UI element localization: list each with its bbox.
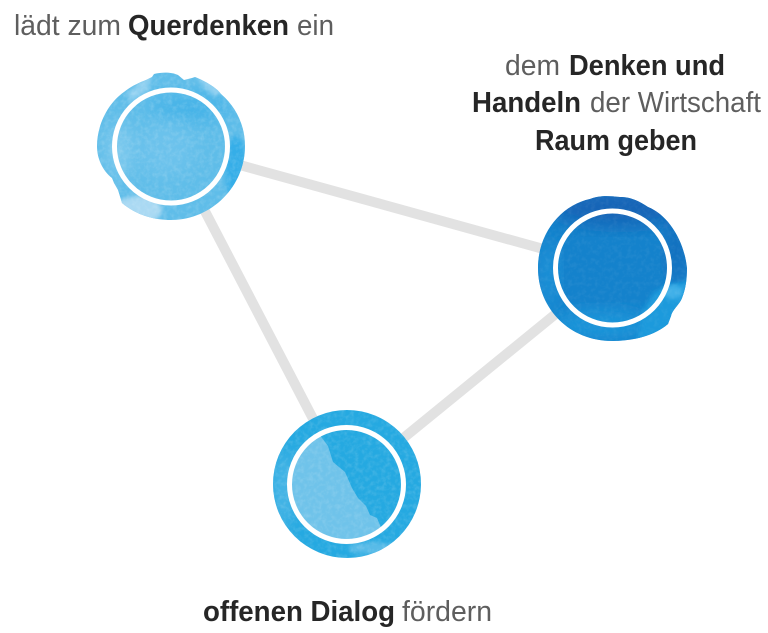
node: Querdenken watercolor circle (97, 72, 245, 220)
label: offenen Dialog fördern: offenen Dialog (203, 596, 395, 628)
node: Wirtschaft watercolor circle (538, 196, 687, 341)
label: dem Denken und Handeln der Wirtschaft Raum geben: Denken und (569, 50, 725, 82)
white ring (556, 211, 670, 325)
label: lädt zum Querdenken ein: lädt zum (14, 10, 121, 42)
label: lädt zum Querdenken ein (14, 10, 334, 42)
label: lädt zum Querdenken ein: Querdenken (128, 10, 289, 42)
white ring (290, 428, 404, 542)
label: dem Denken und Handeln der Wirtschaft Raum geben: Raum geben (535, 125, 697, 157)
label: dem Denken und Handeln der Wirtschaft Raum geben (472, 50, 761, 157)
white ring (114, 90, 228, 203)
node: Dialog watercolor circle (273, 410, 421, 558)
label: offenen Dialog fördern: fördern (402, 596, 492, 628)
label: lädt zum Querdenken ein: ein (297, 10, 334, 42)
label: dem Denken und Handeln der Wirtschaft Raum geben: dem (505, 50, 560, 82)
label: dem Denken und Handeln der Wirtschaft Raum geben: der Wirtschaft (590, 87, 761, 119)
connector lines (171, 146, 612, 484)
label: dem Denken und Handeln der Wirtschaft Raum geben: Handeln (472, 87, 581, 119)
label: offenen Dialog fördern (203, 596, 492, 628)
